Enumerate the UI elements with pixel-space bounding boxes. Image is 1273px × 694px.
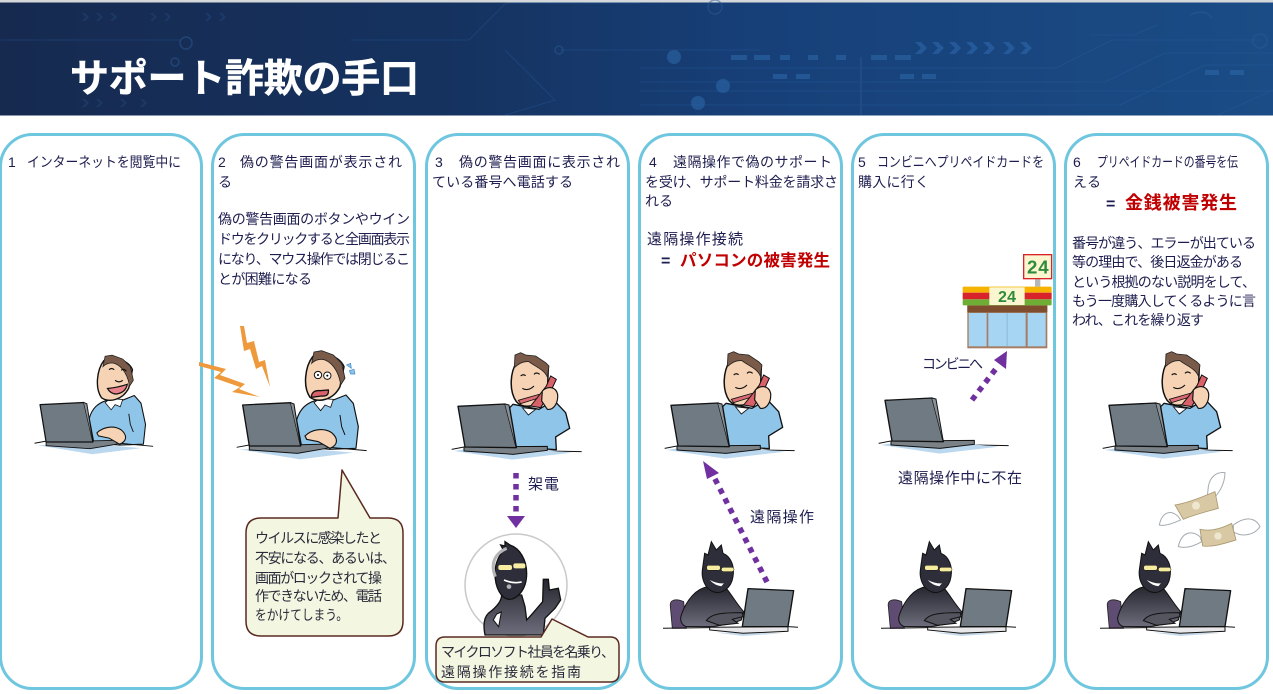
step 2 description xyxy=(218,211,410,287)
step 2 description: ドウをクリックすると全画面表示 xyxy=(218,231,410,247)
step 2 description: 偽の警告画面のボタンやウイン xyxy=(218,211,410,227)
step 6 heading: 6 xyxy=(1073,154,1081,170)
step 3 heading xyxy=(432,154,620,190)
step 2 heading: 偽の警告画面が表示され xyxy=(240,154,402,170)
callout: anxiety: をかけてしまう。 xyxy=(255,607,348,623)
step 1 text: インターネットを閲覧中に xyxy=(27,154,181,170)
panel: step 6 xyxy=(1066,134,1268,688)
panel: step 3 xyxy=(426,134,628,688)
step 4 heading: を受け、サポート料金を請求さ xyxy=(645,174,838,190)
illustration: man browsing xyxy=(35,355,153,454)
step 5 heading xyxy=(858,154,1044,190)
callout: anxiety: ウイルスに感染したと xyxy=(255,530,382,546)
step 6 description xyxy=(1072,235,1256,328)
step 2 heading: 2 xyxy=(218,154,226,170)
step 4 heading: 4 xyxy=(649,154,657,170)
label: remote control: 遠隔操作 xyxy=(750,509,814,526)
arrow: remote control xyxy=(703,461,767,582)
step 6 description: もう一度購入してくるように言 xyxy=(1072,293,1256,309)
label: absent during remote operation: 遠隔操作中に不在 xyxy=(898,470,1022,487)
illustration: man on phone xyxy=(665,352,795,459)
callout: impersonation: 遠隔操作接続を指南 xyxy=(441,664,581,680)
illustration: man on phone xyxy=(1103,352,1233,459)
icon: convenience store: 24 xyxy=(998,289,1016,306)
icon: convenience store xyxy=(963,255,1052,348)
panel: step 1 xyxy=(0,134,202,688)
step 5 heading: 5 xyxy=(858,154,866,170)
step 5 heading: 購入に行く xyxy=(858,174,929,190)
illustration: man on phone xyxy=(452,353,582,460)
step 6 heading xyxy=(1073,154,1238,190)
icon: convenience store: 24 xyxy=(1027,256,1049,277)
icon: flying money xyxy=(1159,473,1260,547)
label: to convenience store: コンビニへ xyxy=(922,356,983,372)
arrow: to store xyxy=(972,351,1007,400)
callout: anxiety xyxy=(246,470,403,636)
step 3 heading: 3 xyxy=(435,154,443,170)
label: remote connection: 遠隔操作接続 xyxy=(647,231,743,248)
illustration: scammer with headset xyxy=(465,534,567,636)
callout: anxiety: 画面がロックされて操 xyxy=(255,570,382,586)
step 2 description: とが困難になる xyxy=(218,271,312,287)
step 6 description: 等の理由で、後日返金がある xyxy=(1072,254,1243,270)
highlight: financial damage: = xyxy=(1106,196,1115,213)
callout: anxiety: 作できないため、電話 xyxy=(255,588,382,604)
highlight: PC damage: = xyxy=(661,253,670,270)
icon: warning lightning bolts xyxy=(199,326,270,397)
illustration: unattended laptop xyxy=(879,398,1009,454)
step 4 heading: れる xyxy=(645,193,673,209)
highlight: financial damage: 金銭被害発生 xyxy=(1125,193,1237,213)
callout: impersonation xyxy=(436,619,619,682)
step 4 heading: 遠隔操作で偽のサポート xyxy=(673,154,832,170)
panel: step 4 xyxy=(640,134,842,688)
label: call: 架電 xyxy=(528,476,559,493)
illustration: scammer at laptop xyxy=(1100,542,1235,636)
illustration: alarmed man xyxy=(237,351,367,459)
step 5 heading: コンビニへプリペイドカードを xyxy=(877,154,1044,170)
illustration: scammer at laptop xyxy=(881,542,1016,636)
callout: anxiety: 不安になる、あるいは、 xyxy=(255,550,396,566)
panel: step 5 xyxy=(852,134,1054,688)
callout: impersonation: マイクロソフト社員を名乗り、 xyxy=(441,644,615,660)
step 6 description: われ、これを繰り返す xyxy=(1072,312,1204,328)
step 2 heading: る xyxy=(218,174,232,190)
step 3 heading: 偽の警告画面に表示され xyxy=(459,154,620,170)
step 2 heading xyxy=(218,154,402,190)
step 3 heading: ている番号へ電話する xyxy=(432,174,573,190)
illustration: scammer at laptop xyxy=(663,542,798,636)
header banner xyxy=(0,0,1273,116)
step 2 description: になり、マウス操作では閉じるこ xyxy=(218,251,410,267)
step 4 heading xyxy=(645,154,838,209)
arrow: call xyxy=(507,473,525,528)
step 6 description: 番号が違う、エラーが出ている xyxy=(1072,235,1256,251)
step 1 text: 1 xyxy=(8,154,16,170)
title: サポート詐欺の手口 xyxy=(70,58,419,101)
step 6 description: という根拠のない説明をして、 xyxy=(1072,274,1256,290)
highlight: PC damage: パソコンの被害発生 xyxy=(680,251,830,270)
step 6 heading: える xyxy=(1073,174,1101,190)
panel: step 2 xyxy=(199,134,414,688)
